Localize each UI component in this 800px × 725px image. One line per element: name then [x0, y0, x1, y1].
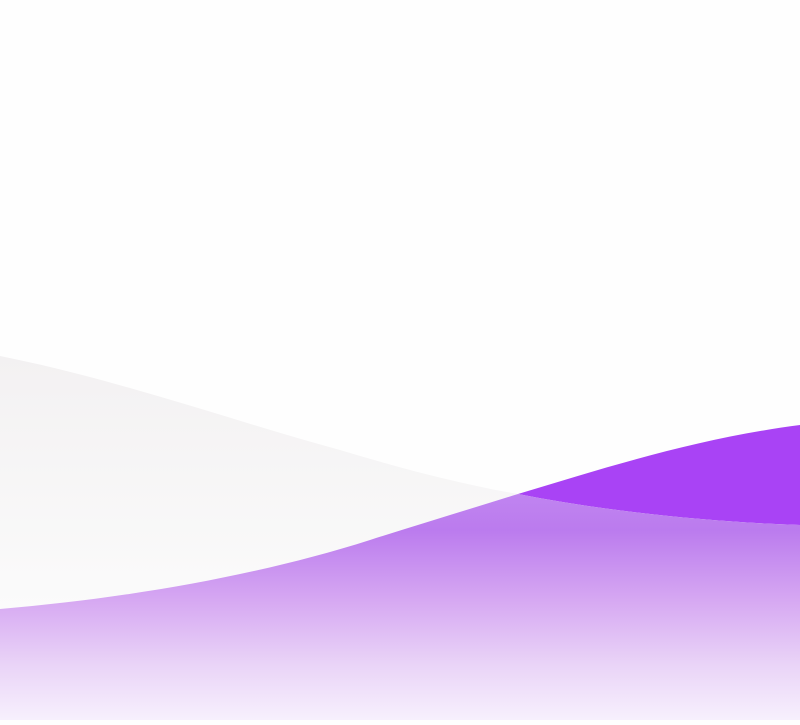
- grey wave: [0, 356, 518, 609]
- solid purple wave: [518, 425, 800, 525]
- light purple gradient wave: [0, 494, 800, 720]
